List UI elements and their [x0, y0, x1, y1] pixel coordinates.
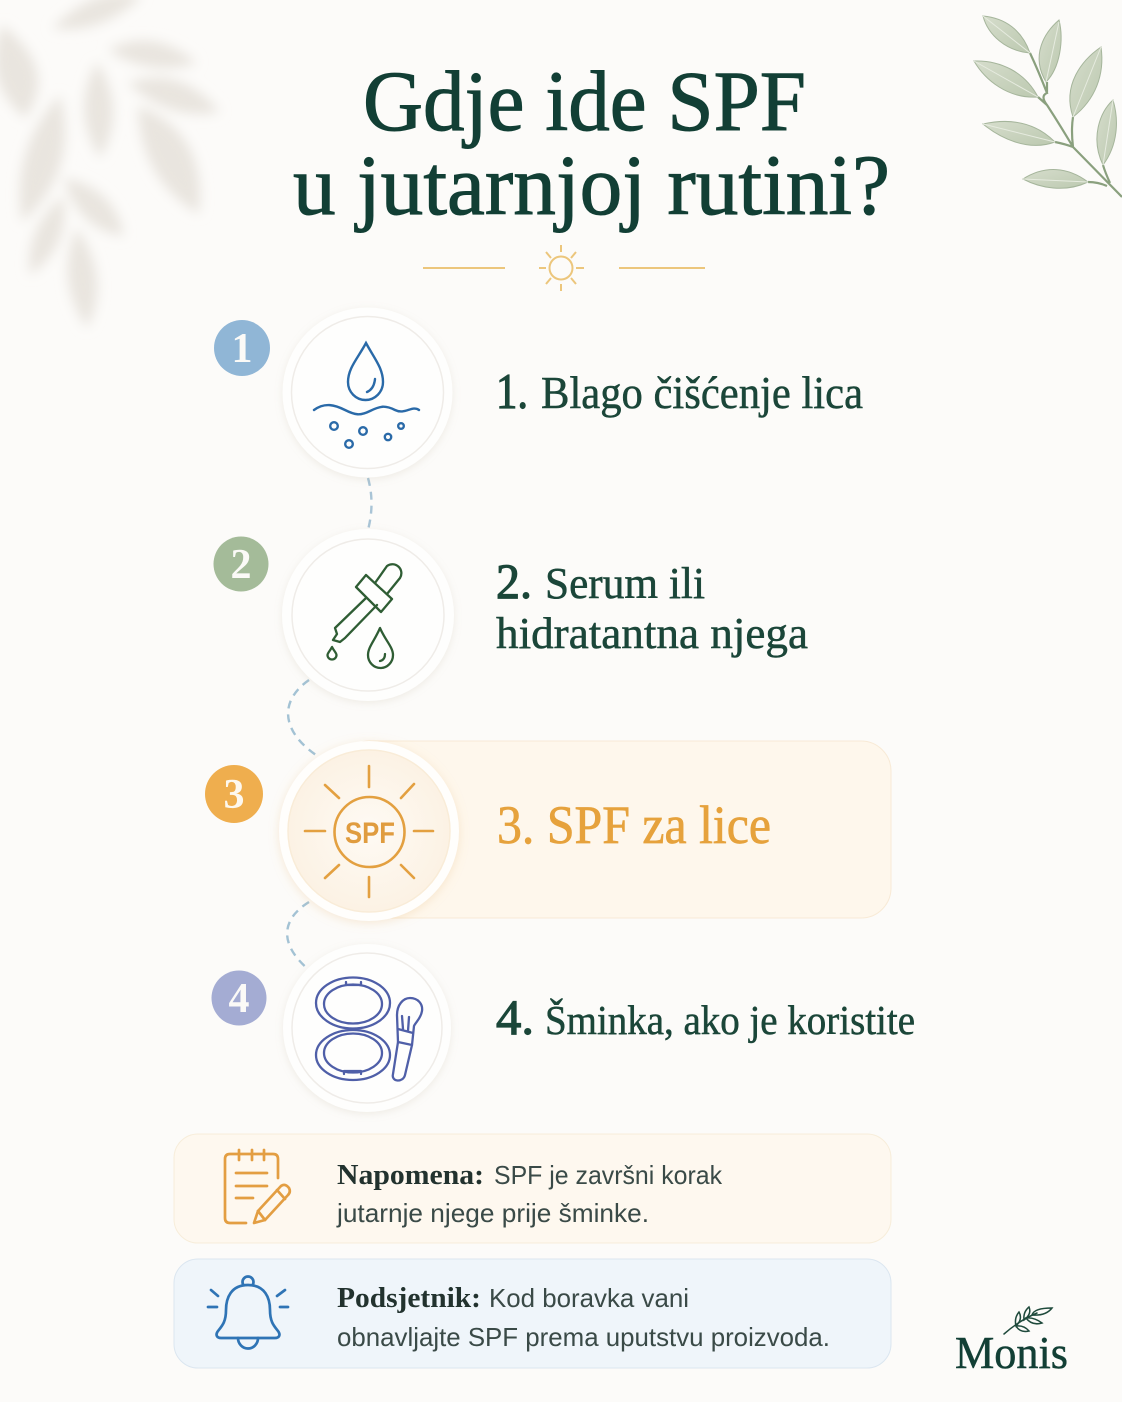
- panel: napomena: [174, 1134, 891, 1243]
- step 1 label: 1.: [496, 363, 528, 419]
- icon circle 4: [283, 944, 451, 1112]
- step 1 label: Blago čišćenje lica: [541, 367, 863, 418]
- step 4 label: Šminka, ako je koristite: [545, 997, 915, 1043]
- connector: step 2 to 3: [288, 680, 316, 755]
- badge 2: 2: [230, 542, 252, 588]
- icon: SPF sun: [305, 766, 433, 897]
- reminder text: Podsjetnik:: [337, 1282, 481, 1314]
- step 2 label: [496, 553, 808, 658]
- highlight panel: step 3: [340, 741, 891, 918]
- icon: logo twig: [1004, 1307, 1052, 1334]
- connector: step 3 to 4: [287, 902, 309, 969]
- badge 2: [214, 536, 268, 592]
- icon: SPF sun: SPF: [345, 817, 395, 850]
- sun divider: [423, 245, 705, 291]
- decorative green branch: [974, 16, 1122, 197]
- icon: bell: [208, 1276, 288, 1348]
- title: u jutarnjoj rutini?: [293, 137, 890, 233]
- note text: [336, 1159, 723, 1228]
- connector: step 1 to 2: [368, 478, 372, 530]
- icon: compact and brush: [316, 978, 422, 1081]
- step 4 label: 4.: [496, 989, 534, 1045]
- step 4: [212, 944, 915, 1112]
- panel: podsjetnik: [174, 1259, 891, 1368]
- logo wordmark: Monis: [955, 1327, 1068, 1378]
- step 2 label: Serum ili: [545, 559, 705, 608]
- logo: Monis: [955, 1307, 1068, 1378]
- icon: notepad and pencil: [225, 1150, 290, 1223]
- badge 3: [205, 765, 263, 823]
- badge 1: [214, 320, 270, 376]
- step 3 label: 3. SPF za lice: [497, 795, 771, 855]
- icon: dropper: [328, 564, 401, 668]
- note text: jutarnje njege prije šminke.: [336, 1198, 649, 1228]
- title: [293, 53, 890, 233]
- step 2 label: 2.: [496, 553, 532, 609]
- reminder text: [337, 1282, 830, 1352]
- step 2 label: hidratantna njega: [496, 609, 808, 658]
- reminder text: obnavljajte SPF prema uputstvu proizvoda.: [337, 1322, 830, 1352]
- step 1: [214, 308, 863, 478]
- title: Gdje ide SPF: [363, 53, 806, 149]
- reminder text: Kod boravka vani: [489, 1283, 689, 1313]
- step 3: [205, 741, 771, 921]
- badge 4: 4: [228, 976, 250, 1022]
- badge 1: 1: [232, 326, 252, 372]
- step 2: [214, 529, 808, 701]
- badge 3: 3: [224, 772, 244, 818]
- note text: Napomena:: [337, 1159, 484, 1191]
- decorative blurred leaf shadow: [0, 0, 220, 328]
- step 4 label: [496, 989, 915, 1045]
- icon circle 3: [279, 741, 459, 921]
- icon circle 1: [282, 308, 452, 478]
- note text: SPF je završni korak: [494, 1160, 723, 1190]
- badge 4: [212, 970, 266, 1026]
- icon circle 2: [282, 529, 454, 701]
- icon: water drop and pores: [314, 343, 419, 448]
